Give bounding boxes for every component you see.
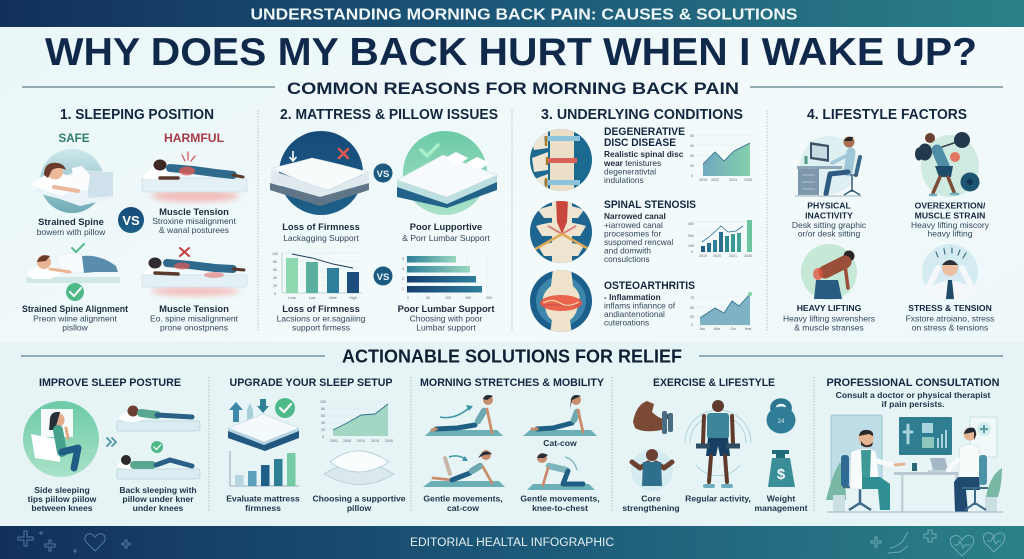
chart: firmness line: 20	[321, 428, 325, 432]
chart: osteoarthritis trend: 25	[690, 315, 694, 319]
text: strained spine: bowem with pillow	[37, 227, 106, 237]
panel: sleeping position	[22, 107, 247, 332]
text: muscle tension second: prone onostpnens	[160, 322, 228, 332]
text: heavy lifting	[783, 303, 875, 332]
top banner	[0, 0, 1024, 27]
chart: firmness line: 2010	[357, 439, 365, 443]
icon: harmful prone sleeping	[142, 248, 247, 296]
icon: cobra stretch right	[523, 395, 597, 436]
chart: firmness bars: 60	[273, 268, 277, 272]
text: poor lumbar support	[398, 303, 494, 332]
text: osteoarthritis: inflams infiannce of	[604, 300, 676, 310]
text: muscle tension: Muscle Tension	[159, 206, 229, 217]
text: side sleeping: between knees	[31, 503, 93, 513]
text: choosing pillow: pillow	[347, 503, 371, 513]
chart: firmness bars: 20	[273, 284, 277, 288]
icon: woman sleeping on side	[30, 149, 113, 213]
chart: disc disease trend: 40	[690, 144, 694, 148]
text: stress and tension	[906, 303, 994, 332]
chart: lumbar support bars: 0	[407, 296, 409, 300]
chart: stenosis bars: 300	[688, 234, 694, 238]
text: degenerative disc disease	[603, 126, 685, 185]
text: muscle tension second	[150, 303, 239, 332]
chart: lumbar support bars: 150	[465, 296, 471, 300]
text: core strengthening: strengthening	[622, 503, 680, 513]
chart: firmness bars: Less	[288, 296, 296, 300]
text: choosing pillow	[312, 494, 406, 513]
text: poor lumbar support: Lumbar support	[416, 322, 476, 332]
illustration: doctor consultation	[826, 415, 1003, 512]
text: weight management	[754, 494, 808, 513]
text: loss of firmness second: Loss of Firmness	[282, 303, 360, 314]
text: poor supportive: Poor Lupportive	[410, 221, 482, 232]
chart: osteoarthritis trend: 50	[690, 306, 694, 310]
solutions section background	[0, 342, 1024, 526]
icon: sagging mattress	[270, 131, 369, 215]
chart: disc disease trend: 2022	[711, 178, 719, 182]
icon: vs badge	[374, 266, 392, 286]
text: loss of firmness second	[277, 303, 366, 332]
chart: lumbar support bars: 4	[402, 267, 404, 271]
chart: lumbar support bars: 5	[402, 257, 404, 261]
chart: firmness line: 60	[321, 414, 325, 418]
text: spinal stenosis: and domwith	[604, 246, 651, 256]
chart: osteoarthritis trend: Jan	[699, 327, 705, 331]
text: overexertion: heavy lifting	[928, 228, 973, 238]
text: back sleeping: under knees	[133, 503, 184, 513]
text: stress and tension: STRESS & TENSION	[908, 303, 992, 313]
panel: mattress and pillow issues	[270, 107, 498, 332]
chart: firmness line: 2005	[343, 439, 351, 443]
heading: morning stretches: MORNING STRETCHES & MOBILITY	[420, 377, 604, 389]
icon: back pain person	[801, 244, 857, 300]
icons: footer left health outlines	[18, 531, 130, 553]
footer band	[0, 526, 1024, 559]
text: degenerative disc disease: DISC DISEASE	[604, 137, 676, 149]
text: back sleeping: Back sleeping with	[119, 485, 197, 495]
icon: vs badge: VS	[377, 169, 389, 180]
heading: lifestyle factors: 4. LIFESTYLE FACTORS	[807, 107, 967, 123]
text: strained spine alignment: pisllow	[62, 322, 89, 332]
chart: firmness bars: 0	[274, 292, 276, 296]
chart: lumbar support bars	[402, 254, 492, 300]
text: degenerative disc disease: DEGENERATIVE	[604, 126, 685, 138]
text: physical inactivity: or/or desk sitting	[798, 228, 860, 238]
text: poor lumbar support: Choosing with poor	[410, 314, 483, 324]
panel: upgrade sleep setup	[226, 377, 406, 513]
icon: weight scale bag	[768, 450, 795, 487]
text: physical inactivity: PHYSICAL	[807, 200, 851, 210]
text: spinal stenosis: SPINAL STENOSIS	[604, 199, 696, 211]
panel: morning stretches	[420, 377, 604, 513]
panel: professional consultation	[826, 377, 1003, 512]
chart: stenosis bars: 400	[688, 222, 694, 226]
icon: kettlebell	[766, 401, 796, 434]
heading: professional consultation: PROFESSIONAL CONSULTATION	[826, 377, 1000, 389]
chart: lumbar support bars: 100	[445, 296, 451, 300]
top banner: UNDERSTANDING MORNING BACK PAIN: CAUSES & SOLUTIONS	[250, 6, 798, 24]
text: strained spine alignment: Strained Spine Alignment	[22, 303, 128, 314]
text: strained spine	[37, 216, 106, 237]
text: evaluate mattress: Evaluate mattress	[226, 494, 300, 504]
text: regular activity: Regular activity,	[685, 494, 751, 504]
chart: osteoarthritis trend: 0	[691, 323, 693, 327]
text: back sleeping: pillow under kner	[122, 494, 194, 504]
chart: stenosis bars: 100	[688, 244, 694, 248]
text: core strengthening: Core	[641, 494, 661, 504]
text: weight management: management	[754, 503, 808, 513]
text: evaluate mattress	[226, 494, 300, 513]
text: degenerative disc disease: Realistic spinal disc	[604, 149, 684, 159]
chart: disc disease trend: 50	[690, 134, 694, 138]
chart: disc disease trend: 2026	[744, 178, 752, 182]
text: muscle tension second: Muscle Tension	[159, 303, 229, 314]
icon: cobra stretch left	[425, 395, 503, 436]
icon: spinal stenosis	[530, 200, 594, 266]
heading: improve sleep posture: IMPROVE SLEEP POSTURE	[39, 377, 182, 389]
chart: firmness line: 2001	[330, 439, 338, 443]
text: osteoarthritis: OSTEOARTHRITIS	[604, 280, 695, 292]
chart: disc disease trend: 2024	[729, 178, 737, 182]
text: poor lumbar support: Poor Lumbar Support	[398, 303, 494, 314]
icon: vs badge: VS	[122, 213, 140, 228]
text: overexertion	[911, 200, 990, 238]
chart: firmness line: 100	[320, 400, 326, 404]
text: gentle movements knee: Gentle movements,	[520, 494, 600, 504]
chart: osteoarthritis trend: 75	[690, 296, 694, 300]
text: stress and tension: on stress & tensions	[912, 322, 988, 332]
text: consult advice: if pain persists.	[881, 399, 945, 409]
text: cat-cow: Cat-cow	[543, 438, 577, 448]
heading: underlying conditions: 3. UNDERLYING CONDITIONS	[541, 107, 743, 123]
text: spinal stenosis: suspomed rencwal	[604, 237, 673, 247]
icon: kettlebell: 24	[778, 419, 785, 425]
chart: lumbar support bars: 30	[426, 296, 430, 300]
text: side sleeping	[28, 485, 97, 513]
section heading: common reasons: COMMON REASONS FOR MORNING BACK PAIN	[287, 79, 739, 98]
label: safe: SAFE	[58, 133, 90, 145]
text: strained spine alignment: Preon wiine alignment	[33, 314, 117, 324]
text: poor supportive: & Porr Lumbar Support	[402, 233, 490, 243]
panel: lifestyle factors	[783, 107, 994, 332]
text: physical inactivity	[792, 200, 867, 238]
text: back sleeping	[119, 485, 197, 513]
icon: stressed man	[922, 244, 978, 300]
text: spinal stenosis: consulctions	[604, 254, 650, 264]
text: overexertion: MUSCLE STRAIN	[915, 210, 985, 220]
chart: firmness bars: 40	[273, 276, 277, 280]
icon: person at desk	[795, 136, 862, 196]
text: evaluate mattress: firmness	[245, 503, 281, 513]
heading: sleeping position: 1. SLEEPING POSITION	[60, 107, 214, 123]
panel: underlying conditions	[530, 107, 752, 334]
chart: stenosis bars: 2019	[699, 254, 707, 258]
icon: chevrons	[107, 438, 116, 446]
text: side sleeping: tips piilow piilow	[28, 494, 97, 504]
text: spinal stenosis: Narrowed canal	[604, 211, 666, 221]
chart: firmness line	[320, 400, 393, 443]
title: WHY DOES MY BACK HURT WHEN I WAKE UP?	[45, 31, 977, 74]
panel: exercise and lifestyle	[622, 377, 808, 513]
text: spinal stenosis	[604, 199, 696, 264]
text: loss of firmness second: support firmess	[292, 322, 350, 332]
chart: firmness line: 0	[322, 435, 324, 439]
text: spinal stenosis: +iarrowed canal	[604, 220, 663, 230]
text: spinal stenosis: procesomes for	[604, 228, 661, 238]
icons: footer right health outlines	[871, 530, 1005, 556]
chart: osteoarthritis trend: Oct	[730, 327, 736, 331]
icon: supportive mattress	[397, 131, 497, 215]
heading: mattress and pillow: 2. MATTRESS & PILLOW ISSUES	[280, 107, 498, 123]
text: osteoarthritis: andiantenotional	[604, 309, 665, 319]
icon: vs badge	[118, 207, 144, 233]
icon: knee to chest	[527, 453, 595, 490]
icon: spinal disc	[530, 128, 592, 192]
chart: disc disease trend: 30	[690, 154, 694, 158]
text: gentle movements knee	[520, 494, 600, 513]
text: overexertion: Heavy lifting miscory	[911, 220, 990, 230]
panel: improve sleep posture	[23, 377, 200, 513]
text: degenerative disc disease: indulations	[604, 175, 644, 185]
label: harmful: HARMFUL	[164, 133, 224, 145]
chart: firmness bars: High	[349, 296, 357, 300]
text: loss of firmness second: Lacsions or er.sagaiiing	[277, 314, 366, 324]
chart: disc disease trend	[690, 134, 752, 182]
text: core strengthening	[622, 494, 680, 513]
text: muscle tension: Stroxine misalignment	[152, 216, 236, 226]
text: heavy lifting: & muscle stranses	[794, 322, 864, 332]
chart: osteoarthritis trend: Year	[744, 327, 752, 331]
icon: overexertion weightlifter	[915, 132, 980, 197]
icon: flexing man	[631, 449, 673, 491]
text: poor supportive	[402, 221, 490, 243]
text: physical inactivity: Desk sitting graphic	[792, 220, 867, 230]
icon: vs badge: VS	[377, 272, 389, 283]
text: gentle movements cat-cow: Gentle movements,	[423, 494, 503, 504]
chart: stenosis bars: 2021	[729, 254, 737, 258]
chart: firmness line: 2040	[385, 439, 393, 443]
icon: knee osteoarthritis	[530, 268, 592, 334]
text: gentle movements cat-cow: cat-cow	[447, 503, 479, 513]
chart: firmness bars	[230, 451, 299, 486]
text: physical inactivity: INACTIVITY	[805, 210, 853, 220]
chart: disc disease trend: 2019	[699, 178, 707, 182]
text: stress and tension: Fxstore atroiano, stress	[906, 314, 994, 324]
text: muscle tension: & wanal posturees	[159, 225, 229, 235]
heading: upgrade sleep setup: UPGRADE YOUR SLEEP SETUP	[230, 377, 393, 389]
text: consult advice	[836, 390, 990, 409]
heading: exercise lifestyle: EXERCISE & LIFESTYLE	[653, 377, 775, 389]
text: loss of firmness: Loss of Firmness	[282, 221, 360, 232]
chart: osteoarthritis trend	[690, 292, 752, 331]
text: gentle movements cat-cow	[423, 494, 503, 513]
icon: weight scale bag: $	[777, 466, 786, 483]
chart: osteoarthritis trend: Mar	[714, 327, 721, 331]
chart: firmness bars: Low	[309, 296, 316, 300]
chart: stenosis bars: 2026	[744, 254, 752, 258]
icon: side sleeper with check	[26, 244, 120, 283]
text: side sleeping: Side sleeping	[34, 485, 90, 495]
footer text: EDITORIAL HEALTAL INFOGRAPHIC	[410, 537, 614, 549]
text: degenerative disc disease: degenerativtal	[604, 166, 656, 176]
chart: firmness bars: Mide	[329, 296, 337, 300]
chart: disc disease trend: 20	[690, 164, 694, 168]
text: muscle tension second: Eo. spine misalignment	[150, 314, 239, 324]
section heading: solutions: ACTIONABLE SOLUTIONS FOR RELIEF	[342, 346, 682, 366]
chart: firmness line: 2015	[371, 439, 379, 443]
icon: harmful stomach sleeping	[142, 152, 247, 202]
chart: stenosis bars: 2020	[713, 254, 721, 258]
chart: firmness bars	[272, 252, 362, 300]
chart: stenosis bars	[688, 220, 752, 258]
chart: lumbar support bars: 200	[486, 296, 492, 300]
icon: vs badge	[374, 164, 392, 182]
text: overexertion: OVEREXERTION/	[915, 200, 986, 210]
text: osteoarthritis: cuteroations	[604, 318, 649, 328]
chart: lumbar support bars: 2	[402, 277, 404, 281]
chart: firmness bars: 80	[273, 260, 277, 264]
text: heavy lifting: Heavy lifting swrenshers	[783, 314, 875, 324]
text: loss of firmness	[282, 221, 360, 243]
text: choosing pillow: Choosing a supportive	[312, 494, 406, 504]
icon: arm with dumbbell	[633, 401, 673, 434]
text: degenerative disc disease: wear tenistures	[603, 158, 661, 168]
chart: stenosis bars: 0	[691, 250, 693, 254]
icon: green check badge	[66, 283, 84, 301]
text: muscle tension	[152, 206, 236, 235]
icon: gentle stretch left	[423, 450, 505, 487]
chart: firmness line: 40	[321, 421, 325, 425]
chart: lumbar support bars: 1	[402, 287, 404, 291]
text: gentle movements knee: knee-to-chest	[532, 503, 588, 513]
text: osteoarthritis: - Inflammation	[604, 292, 661, 302]
text: strained spine alignment	[22, 303, 128, 332]
text: loss of firmness: Lackagging Support	[283, 233, 359, 243]
text: heavy lifting: HEAVY LIFTING	[797, 303, 862, 313]
chart: disc disease trend: 0	[691, 174, 693, 178]
icon: back sleeper on mattress	[117, 441, 200, 479]
icon: side sleeper on mattress	[117, 406, 200, 431]
text: consult advice: Consult a doctor or physical therapist	[836, 390, 990, 400]
icon: dumbbell man	[685, 400, 751, 486]
chart: firmness bars: 100	[272, 252, 278, 256]
icon: side sleeping with pillow	[23, 401, 99, 477]
text: weight management: Weight	[767, 494, 795, 504]
chart: firmness line: 80	[321, 407, 325, 411]
icon: stacked pillows	[324, 451, 394, 484]
text: osteoarthritis	[604, 280, 695, 328]
icon: mattress with arrows	[228, 398, 299, 451]
text: strained spine: Strained Spine	[38, 216, 104, 227]
